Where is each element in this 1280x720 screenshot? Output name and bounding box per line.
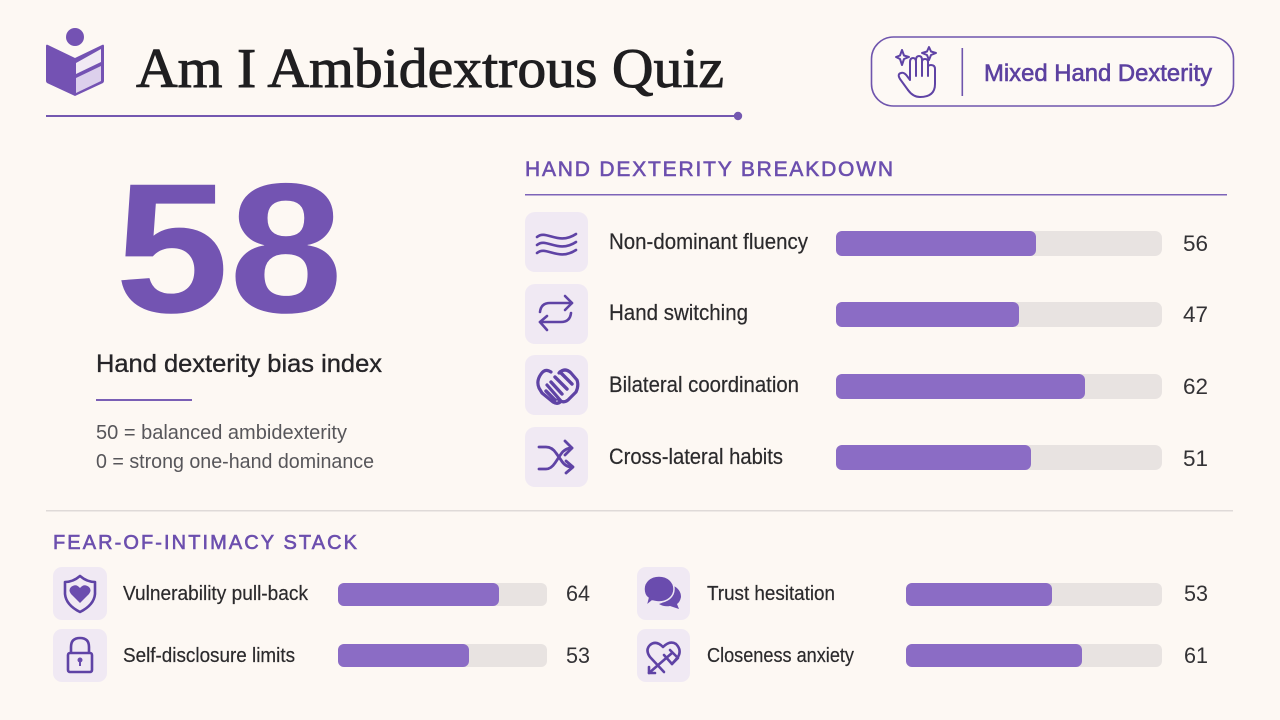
row: trust hesitation: 53	[1184, 581, 1208, 606]
title: Am I Ambidextrous Quiz	[136, 38, 724, 100]
row: cross-lateral habits: Cross-lateral habits	[609, 444, 783, 469]
row: non-dominant fluency: 56	[1183, 231, 1208, 256]
row: cross-lateral habits: 51	[1183, 446, 1208, 471]
section heading: FEAR-OF-INTIMACY STACK	[53, 532, 358, 554]
score rule	[96, 399, 192, 401]
icon: clasped hands	[538, 370, 578, 403]
row: vulnerability pull-back	[53, 567, 590, 620]
row: self-disclosure limits: 53	[566, 643, 590, 668]
title underline	[46, 112, 742, 120]
big score: 58	[115, 146, 343, 352]
scale note: 50 = balanced ambidexterity	[96, 422, 347, 444]
icon: switch arrows	[540, 296, 572, 330]
row: non-dominant fluency	[525, 212, 1208, 272]
row: hand switching: 47	[1183, 302, 1208, 327]
badge label: Mixed Hand Dexterity	[984, 60, 1212, 87]
row: vulnerability pull-back: Vulnerability pull-back	[123, 583, 309, 605]
row: hand switching	[525, 284, 1208, 344]
row: self-disclosure limits	[53, 629, 590, 682]
panel: fear-of-intimacy stack	[53, 532, 1208, 682]
row: trust hesitation: Trust hesitation	[707, 583, 835, 605]
row: closeness anxiety: 61	[1184, 643, 1208, 668]
row: self-disclosure limits: Self-disclosure limits	[123, 645, 295, 667]
row: bilateral coordination: Bilateral coordination	[609, 372, 799, 397]
row: bilateral coordination	[525, 355, 1208, 415]
score label: Hand dexterity bias index	[96, 350, 383, 378]
icon: heart with arrow	[648, 643, 680, 673]
icon: shield with heart	[65, 576, 95, 612]
row: cross-lateral habits	[525, 427, 1208, 487]
row: trust hesitation	[637, 567, 1208, 620]
row: non-dominant fluency: Non-dominant fluency	[609, 229, 808, 254]
row: vulnerability pull-back: 64	[566, 581, 590, 606]
row: hand switching: Hand switching	[609, 300, 748, 325]
header	[46, 28, 742, 120]
heading rule	[525, 194, 1227, 196]
row: bilateral coordination: 62	[1183, 374, 1208, 399]
scale note: 0 = strong one-hand dominance	[96, 451, 374, 473]
scale note	[96, 422, 374, 473]
row: closeness anxiety: Closeness anxiety	[707, 645, 854, 667]
section heading: HAND DEXTERITY BREAKDOWN	[525, 158, 893, 181]
icon: waves	[537, 234, 576, 254]
badge divider	[962, 48, 963, 96]
icon: sparkling hand	[896, 47, 936, 97]
icon: padlock	[68, 638, 92, 672]
result badge	[872, 37, 1234, 106]
row: closeness anxiety	[637, 629, 1208, 682]
panel: hand dexterity breakdown	[525, 158, 1227, 487]
icon: shuffle arrows	[539, 441, 573, 473]
icon: speech bubbles	[644, 576, 681, 609]
icon: open book reader	[46, 28, 104, 96]
panel: bias index score	[96, 146, 383, 473]
